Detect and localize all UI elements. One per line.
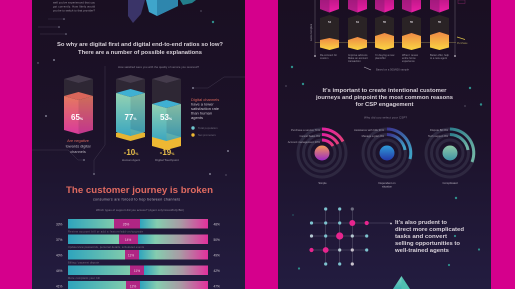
prism: 53 percent: 53%	[160, 113, 173, 122]
question label: Why did you select your CSP?	[364, 116, 407, 120]
heading: customer journey broken: The customer journey is broken	[66, 185, 213, 196]
bar row 5	[56, 281, 220, 289]
captions under prisms: entire home	[402, 56, 416, 60]
legend	[191, 126, 218, 137]
radial: complicated: Complicated	[443, 181, 458, 185]
heading: why ratios are low: There are a number of possible explanations	[78, 50, 202, 56]
captions under prisms: transaction	[348, 59, 361, 63]
captions under prisms: experience	[402, 59, 415, 63]
callout: digital channels satisfaction: Digital channels	[191, 97, 219, 102]
prism: 77 percent: 77%	[124, 113, 137, 122]
bar row 3: 49%	[214, 254, 220, 258]
prism: 77 percent	[116, 75, 145, 141]
radial: simple: Simple	[318, 181, 327, 185]
radial: dependent on situation: situation	[382, 184, 393, 188]
intro text: well you've experienced that you	[53, 0, 96, 4]
axis markers and side legend	[314, 0, 468, 57]
bar row 5: 12%	[130, 284, 136, 288]
magenta prisms row	[320, 0, 449, 12]
footnote	[364, 67, 410, 72]
value: minus 10 percent, human agent	[122, 148, 140, 162]
heading: intentional journeys: journeys and pinpoint the most common reasons	[315, 95, 453, 101]
text: direct complicated tasks: selling opportunities to	[395, 241, 461, 247]
decorative connector lines	[32, 19, 245, 174]
axes	[315, 0, 456, 56]
text: direct complicated tasks: well-trained agents	[394, 248, 449, 254]
bar row 1: 33%	[56, 222, 63, 226]
caption: 65 percent: towards digital	[66, 144, 91, 148]
text: direct complicated tasks	[394, 220, 464, 254]
value: minus 19 percent, digital touchpoint	[155, 148, 179, 162]
bar row 4: More complaint your bill	[68, 277, 100, 280]
prism: 53 percent	[152, 75, 181, 150]
bar row 3: 11%	[128, 254, 134, 258]
radial: dependent on situation	[354, 128, 411, 188]
bar row 4: 42%	[214, 269, 220, 273]
footnote: Based on a 500/600 sample	[376, 68, 410, 72]
axis label: Less complex	[309, 23, 313, 41]
callout: digital channels satisfaction: than human	[191, 110, 212, 116]
value: minus 10 percent, human agent: Human Agent	[122, 158, 140, 162]
text: direct complicated tasks: tasks and convert	[395, 234, 447, 240]
caption: 65 percent: Are negative	[67, 138, 89, 143]
text: direct complicated tasks: direct more complicated	[395, 227, 464, 233]
gold prisms row	[320, 15, 449, 50]
captions under prisms: custom	[320, 56, 328, 60]
caption: 65 percent	[66, 138, 91, 154]
bar row 1: 48%	[214, 222, 220, 226]
bar row 2	[56, 234, 220, 249]
heading: intentional journeys	[315, 88, 453, 108]
callout: digital channels satisfaction	[191, 97, 220, 120]
bar row 4: 44%	[56, 269, 63, 273]
captions under prisms: When I renew	[402, 53, 418, 57]
bar row 1: 26%	[123, 222, 129, 226]
legend: Net promoters	[198, 133, 216, 137]
panel: left column	[32, 0, 245, 289]
bar row 4: 11%	[134, 269, 140, 273]
captions under prisms: Better offer, help	[430, 53, 450, 57]
captions under prisms: plan/offer	[375, 56, 386, 60]
radial: dependent on situation: Manage a plan 9%	[362, 134, 385, 138]
bar row 2: 37%	[56, 238, 63, 242]
bar row 2: Update/view passwords, personal details, scheduled events	[68, 246, 145, 249]
gold prisms row: 61	[356, 20, 359, 24]
illustration: crystal shards	[128, 0, 196, 23]
question label: Which types of support did you access? (Agent only/mixed/fully/Bot)	[96, 208, 184, 212]
question label: How satisfied were you with the quality of service you received?	[118, 65, 200, 69]
radial: complicated: Dispute Bill 9%	[430, 128, 449, 132]
heading: intentional journeys: It's important to create intentional customer	[322, 88, 447, 94]
heading: intentional journeys: for CSP engagement	[356, 102, 414, 108]
captions under prisms: to a new agent	[430, 56, 447, 60]
value: minus 19 percent, digital touchpoint: -19%	[160, 148, 175, 157]
captions under prisms: Improve add-ons	[348, 53, 368, 57]
heading: why ratios are low: So why are digital first and digital end-to-end ratios so low?	[57, 42, 224, 48]
intro text	[53, 0, 96, 12]
text: direct complicated tasks: It's also prudent to	[395, 220, 448, 226]
axis markers and side legend: Purchase	[457, 42, 468, 45]
illustration: teal pyramid	[393, 276, 410, 289]
radial: simple	[288, 128, 346, 185]
bar row 3: Billing / payment dispute	[68, 262, 100, 264]
bar row 1: Review account bill or add a feature/add-on/upgrade	[68, 230, 144, 234]
intro text: you be to switch to that provider?	[53, 8, 96, 12]
gold prisms row: 55	[383, 20, 386, 24]
bar row 5: 41%	[56, 284, 63, 288]
bar row 3: 40%	[56, 254, 63, 258]
callout: digital channels satisfaction: satisfaction rate	[191, 106, 220, 111]
radial: simple: Account management 20%	[288, 140, 321, 144]
bar row 2: 14%	[125, 238, 131, 242]
gold prisms row: 55	[438, 20, 441, 24]
panel: right column	[278, 0, 491, 289]
stars	[37, 10, 229, 176]
radial: dependent on situation: Assistance with bills 31%	[354, 128, 385, 132]
stars	[285, 66, 482, 270]
radial: simple: Purchase a service 71%	[291, 128, 321, 132]
gold prisms row: 54	[328, 20, 331, 24]
intro text: got currently. How likely would	[53, 4, 96, 8]
gold prisms row: 55	[410, 20, 413, 24]
heading: why ratios are low	[57, 42, 224, 56]
dot grid network	[309, 207, 392, 266]
bar row 5: 47%	[214, 284, 220, 288]
prism: 65 percent: 65%	[71, 113, 84, 122]
subheading: consumers are forced to hop between channels	[93, 198, 180, 202]
value: minus 19 percent, digital touchpoint: Digital Touchpoint	[155, 158, 179, 162]
bar row 3	[56, 250, 220, 264]
legend: Total population	[198, 126, 218, 130]
callout: digital channels satisfaction: have a lower	[191, 102, 214, 106]
captions under prisms: I'm buying a new	[375, 53, 395, 57]
captions under prisms: Make an account	[348, 56, 368, 60]
radial: simple: Cancel Sales 9%	[300, 134, 321, 138]
bar row 2: 50%	[214, 238, 220, 242]
caption: 65 percent: channels	[70, 149, 86, 154]
value: minus 10 percent, human agent: -10%	[124, 148, 139, 157]
captions under prisms	[320, 53, 450, 63]
bar row 1	[56, 219, 220, 234]
captions under prisms: Re-connect for	[320, 53, 337, 57]
bar row 4	[56, 266, 220, 280]
radial: complicated: Tech support 9%	[428, 134, 449, 138]
radial: dependent on situation: Dependent on	[379, 181, 396, 185]
prism: 65 percent	[64, 75, 93, 134]
callout: digital channels satisfaction: agents	[191, 115, 203, 120]
radial: complicated	[426, 128, 474, 185]
